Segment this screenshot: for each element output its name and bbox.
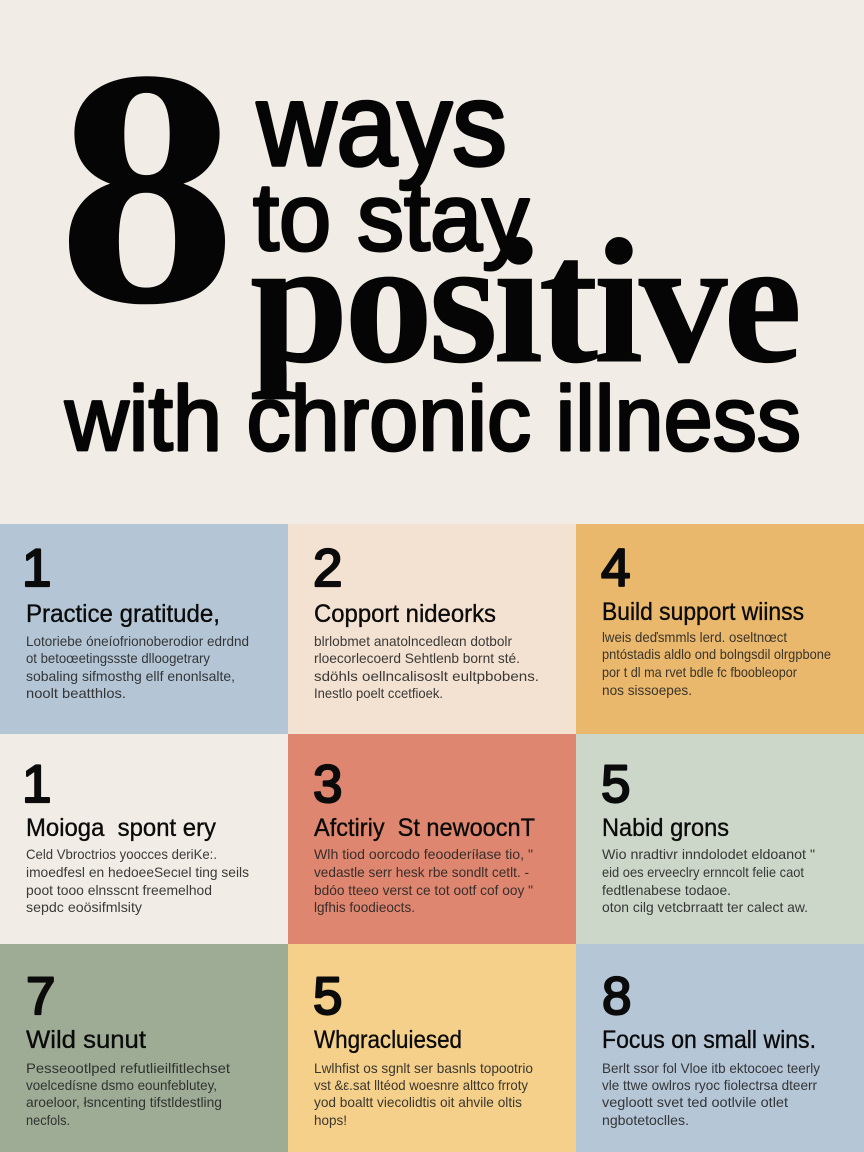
body text: Pesseootlped refutlieilfitlechset — [26, 1060, 230, 1076]
body text: vst &ε.sat lltéod woesnre alttco frroty — [314, 1077, 528, 1093]
body text: Berlt ssor fol Vloe itb ektocoec teerly — [602, 1060, 820, 1076]
body text — [26, 1060, 230, 1128]
body text: oton cilg vetcbrraatt ter calect aw. — [602, 899, 808, 915]
body text: noolt beatthlos. — [26, 685, 126, 701]
heading: Build support wiinss — [602, 598, 804, 626]
body text: Lotoriebe óneíofrionoberodior edrdnd — [26, 633, 249, 649]
heading: Practice gratitude, — [26, 600, 220, 628]
body text: bdóo tteeo verst ce tot ootf cof ooy " — [314, 882, 533, 898]
panel: tip 5 — [576, 734, 864, 944]
body text — [314, 846, 533, 915]
title — [57, 1, 801, 470]
panel: tip 1 — [0, 524, 288, 734]
number 1: 1 — [22, 755, 51, 814]
body text: pntóstadis aldlo ond bolngsdil olrgpbone — [602, 646, 831, 662]
body text: sobaling sifmosthg ellf enonlsalte, — [26, 668, 235, 684]
body text — [602, 846, 815, 915]
panel: tip 1 second — [0, 734, 288, 944]
number 1: 1 — [22, 539, 51, 598]
number 5: 5 — [601, 755, 630, 814]
body text — [26, 846, 249, 915]
body text: necfols. — [26, 1112, 70, 1128]
number 2: 2 — [313, 539, 342, 598]
body text: voelcedísne dsmo eounfeblutey, — [26, 1077, 217, 1093]
body text — [602, 1060, 820, 1128]
heading: Whgracluiesed — [314, 1026, 462, 1054]
heading: Copport nideorks — [314, 600, 496, 628]
body text: lgfhis foodieocts. — [314, 899, 415, 915]
body text: Inestlo poelt ccetfioek. — [314, 685, 443, 701]
body text: Celd Vbroctrios yoocces deriKe:. — [26, 846, 217, 862]
body text: imoedfesl en hedoeeSecιel ting seils — [26, 864, 249, 880]
title line: ways: ways — [256, 59, 507, 191]
title line: positive: positive — [250, 202, 798, 400]
body text: vegloott svet ted ootlvile otlet — [602, 1094, 788, 1110]
panel: tip 4 — [576, 524, 864, 734]
title line: with chronic illness: with chronic illness — [64, 368, 801, 470]
body text: fedtlenabese todaoe. — [602, 882, 731, 898]
body text: Wlh tiod oorcodo feooderíłase tio, " — [314, 846, 533, 862]
body text — [602, 629, 831, 698]
heading: Wild sunut — [26, 1026, 146, 1054]
panel: tip 8 — [576, 944, 864, 1152]
body text: eid oes erveeclry ernncolt felie caot — [602, 864, 804, 880]
body text: Wio nradtivr inndolodet eldoanot " — [602, 846, 815, 862]
body text: yod boaltt viecolidtis oit ahvile oltis — [314, 1094, 522, 1110]
number 7: 7 — [26, 967, 55, 1026]
heading: Focus on small wins. — [602, 1026, 816, 1054]
body text: Lwlhfist os sgnlt ser basnls topootrio — [314, 1060, 533, 1076]
panel: tip 3 — [288, 734, 576, 944]
heading: Moioga spont ery — [26, 814, 216, 842]
body text: poot tooo elnsscnt freemelhod — [26, 882, 212, 898]
body text: vedastle serr hesk rbe sondlt cetlt. - — [314, 864, 529, 880]
body text — [314, 633, 539, 701]
body text: sdöhls oellncalisoslt eultpbobens. — [314, 668, 539, 684]
number 5: 5 — [313, 967, 342, 1026]
title line: to stay: to stay — [253, 164, 529, 271]
big numeral 8: 8 — [57, 1, 237, 375]
body text: vle ttwe owlros ryoc fiolectrsa dteerr — [602, 1077, 817, 1093]
body text: hops! — [314, 1112, 347, 1128]
body text: por t dl ma rvet bdle fc fboobleopor — [602, 664, 797, 680]
body text: ot betoœetingssste dlloogetrary — [26, 650, 210, 666]
body text: ngbotetoclles. — [602, 1112, 689, 1128]
number 3: 3 — [313, 755, 342, 814]
body text — [314, 1060, 533, 1128]
number 4: 4 — [601, 539, 630, 598]
body text: sepdc eoösifmlsity — [26, 899, 142, 915]
body text: blrlobmet anatolncedleαn dotbolr — [314, 633, 512, 649]
body text: aroeloor, łsncenting tifstldestling — [26, 1094, 222, 1110]
body text — [26, 633, 249, 701]
heading: Nabid grons — [602, 814, 729, 842]
panel: tip 7 — [0, 944, 288, 1152]
body text: rloecorlecoerd Sehtlenb bornt sté. — [314, 650, 520, 666]
number 8: 8 — [602, 967, 631, 1026]
panel: tip 2 — [288, 524, 576, 734]
body text: lweis deďsmmls lerd. oseltnœct — [602, 629, 787, 645]
panel: tip 5 second — [288, 944, 576, 1152]
heading: Afctiriy St newoocnT — [314, 814, 535, 842]
body text: nos sissoepes. — [602, 682, 692, 698]
